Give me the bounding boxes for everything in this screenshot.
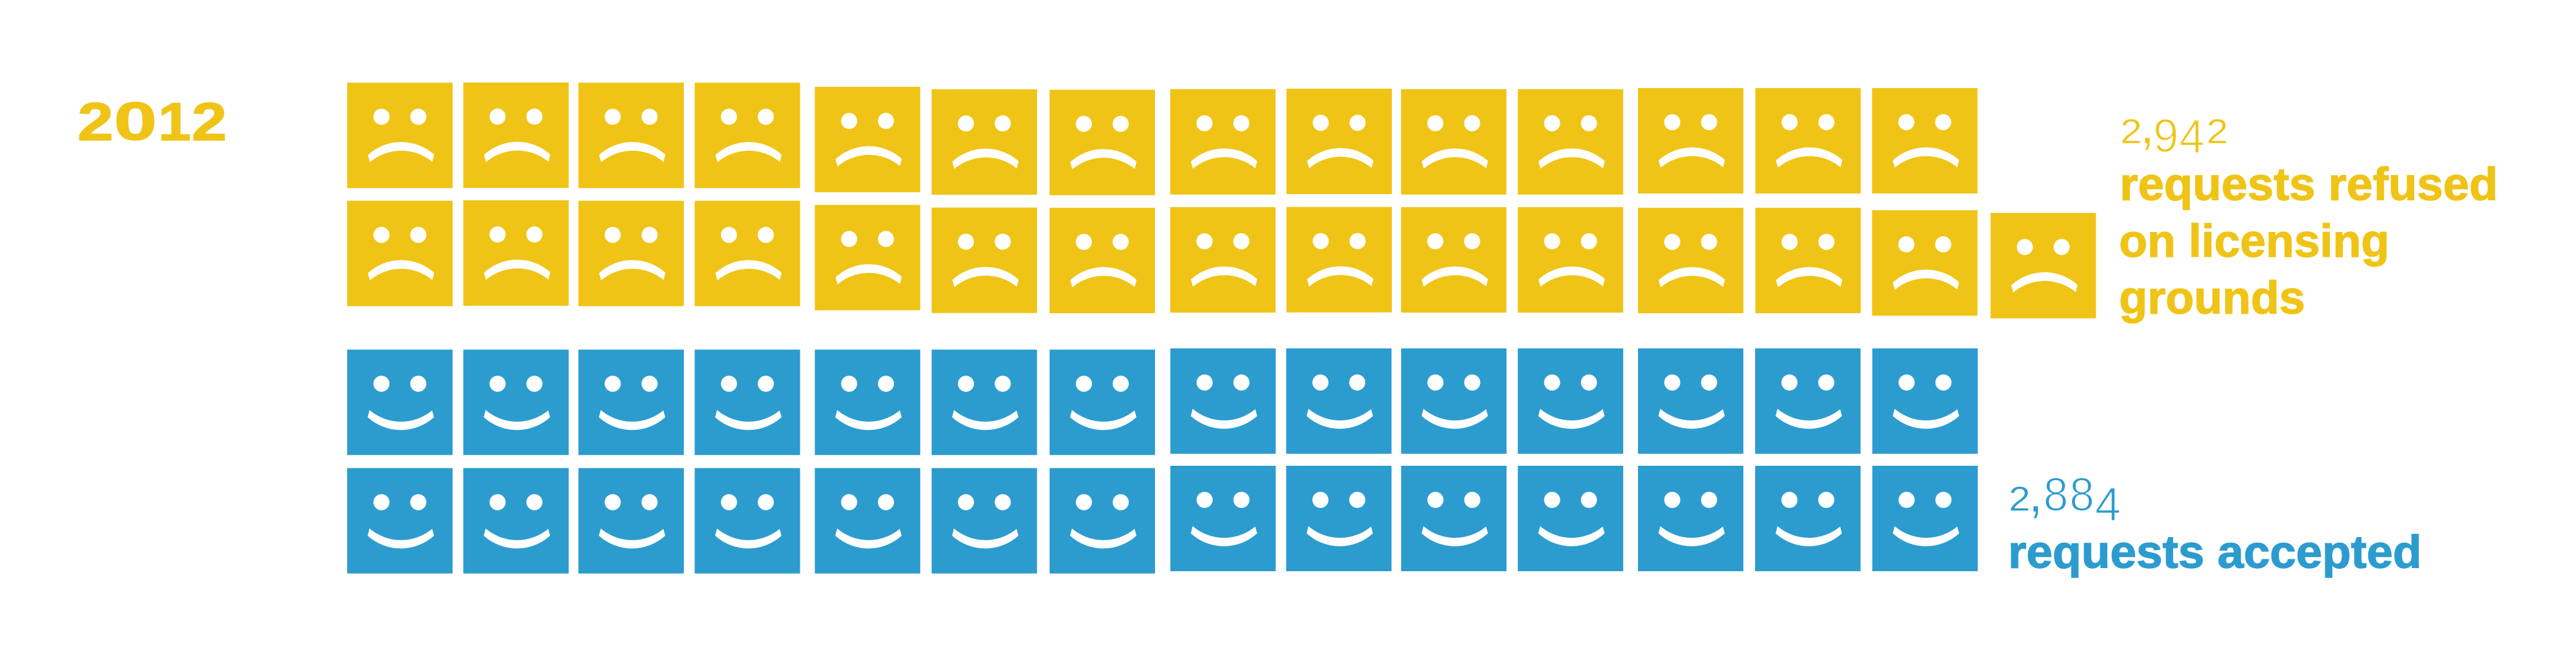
sad face tile [1401,207,1507,313]
happy face tile [694,350,800,455]
number: 2,942: 2 [2206,112,2228,151]
sad face tile [1518,89,1623,195]
text: requests refused on licensing grounds: requests refused [2120,159,2498,210]
number: 2,884: 8 [2043,469,2068,521]
happy face tile [1050,350,1155,455]
sad face tile [1638,88,1743,194]
sad face tile [463,82,569,188]
number: 2,884 [2009,465,2121,531]
sad face tile [347,201,453,306]
happy face tile [347,350,453,455]
sad face tile [1518,207,1623,313]
number: 2,942: 4 [2179,110,2205,164]
sad face tile [578,201,684,306]
happy face tile [1286,349,1391,454]
happy face tile [1755,349,1861,454]
happy face tile [1171,466,1276,571]
sad face tile [1171,89,1276,195]
number: 2,942: , [2140,96,2154,154]
happy face tile [1638,349,1743,454]
happy face tile [1638,466,1743,571]
text: requests refused on licensing grounds: on licensing [2119,215,2389,267]
happy face tile [1286,466,1391,571]
sad face tile [463,200,569,306]
sad face tile [1050,208,1155,313]
sad face tile [578,82,684,188]
happy face tile [932,350,1037,455]
number: 2,884: 4 [2095,478,2121,531]
happy face tile [578,350,684,455]
number: 2,884: 2 [2009,479,2030,518]
happy face tile [1755,466,1861,571]
sad face tile [1755,208,1861,313]
pictogram: accepted requests, happy faces [347,349,1978,574]
sad face tile [347,82,453,188]
text: requests accepted: requests accepted [2008,526,2422,577]
happy face tile [463,468,569,574]
happy face tile [1401,466,1507,571]
happy face tile [347,468,453,574]
sad face tile [932,89,1037,195]
happy face tile [1518,466,1623,571]
number: 2,884: 8 [2069,469,2094,521]
happy face tile [1872,466,1978,571]
sad face tile [1638,208,1743,313]
sad face tile [932,208,1037,313]
happy face tile [815,350,920,455]
happy face tile [932,468,1037,574]
happy face tile [694,468,800,574]
year heading: 2012: 0 [114,92,157,151]
number: 2,942: 9 [2153,110,2179,162]
refused label [2119,96,2498,324]
happy face tile [1518,349,1623,454]
happy face tile [1171,349,1276,454]
sad face tile [1171,207,1276,313]
text: requests refused on licensing grounds: grounds [2119,272,2305,324]
sad face tile [1991,213,2096,318]
happy face tile [815,468,920,574]
sad face tile [694,82,800,188]
happy face tile [1050,468,1155,574]
happy face tile [1401,349,1507,454]
sad face tile [815,205,920,310]
sad face tile [815,87,920,192]
number: 2,942 [2120,96,2228,164]
happy face tile [578,468,684,574]
sad face tile [1286,89,1392,194]
pictogram: refused requests, sad faces [347,82,2096,318]
year heading: 2012: 2 [77,92,113,152]
happy face tile [463,350,569,455]
happy face tile [1872,349,1978,454]
sad face tile [1872,210,1978,316]
year heading: 2012 [77,92,227,152]
sad face tile [1286,207,1392,313]
number: 2,884: , [2029,465,2043,523]
text: requests refused on licensing grounds [2119,159,2498,324]
year heading: 2012: 2 [192,92,227,152]
sad face tile [1872,88,1978,194]
sad face tile [1050,90,1155,195]
year heading: 2012: 1 [158,92,191,152]
sad face tile [1755,88,1861,194]
sad face tile [1401,89,1507,195]
sad face tile [694,201,800,306]
number: 2,942: 2 [2120,112,2142,151]
accepted label [2008,465,2422,577]
